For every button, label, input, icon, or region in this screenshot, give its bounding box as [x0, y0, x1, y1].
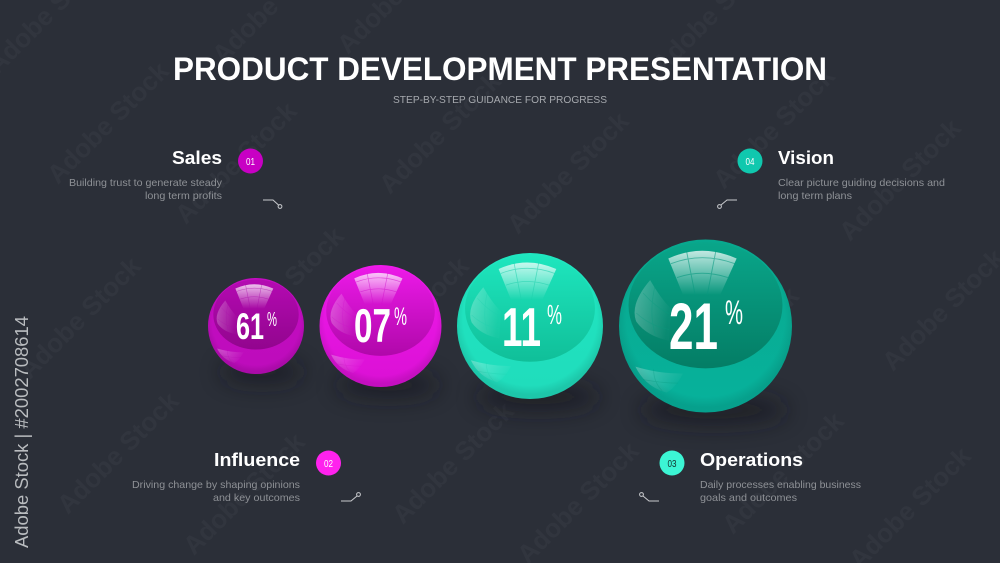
vertical stock id text: Adobe Stock | #2002708614: [12, 316, 32, 548]
text: Adobe Stock: [216, 220, 350, 354]
text block: influence description: Driving change by shaping opinions: [132, 479, 300, 491]
sphere: 21 percent: %: [725, 294, 743, 332]
panel: sales label: [69, 147, 282, 208]
text: Adobe Stock: [716, 405, 850, 539]
connector: vision: [718, 200, 737, 208]
subtitle: STEP-BY-STEP GUIDANCE FOR PROGRESS: [393, 94, 607, 106]
badge 01: 01: [246, 156, 255, 168]
sphere: 07 percent: %: [394, 303, 407, 331]
sphere: 07 percent: [320, 265, 442, 399]
text: Adobe Stock: [373, 65, 507, 199]
sphere: 21 percent: 21: [669, 289, 718, 363]
sphere: 61 percent: [208, 278, 304, 385]
text block: influence description: [132, 479, 300, 504]
text block: influence description: and key outcomes: [213, 492, 300, 504]
text: Adobe Stock: [41, 55, 175, 189]
text: Adobe Stock: [501, 105, 635, 239]
text: Adobe Stock: [51, 385, 185, 519]
badge 04: [738, 148, 762, 174]
panel: vision label: [718, 147, 945, 208]
text block: operations description: goals and outcomes: [700, 492, 797, 504]
badge 04: 04: [746, 156, 755, 168]
badge 03: [660, 450, 684, 476]
text block: vision description: long term plans: [778, 190, 852, 202]
text: Adobe Stock: [707, 60, 841, 194]
badge 01: [238, 148, 263, 174]
text: Adobe Stock: [386, 395, 520, 529]
connector: operations: [640, 493, 659, 501]
sphere: 61 percent: 61: [236, 306, 264, 347]
text: Adobe Stock: [833, 112, 967, 246]
sphere: 11 percent: 11: [502, 296, 541, 358]
panel: influence label: [132, 449, 360, 504]
text block: sales description: Building trust to generate steady: [69, 177, 223, 189]
text: Adobe Stock: [671, 280, 805, 414]
connector: influence: [341, 493, 360, 501]
text block: sales description: [69, 177, 223, 202]
text block: vision description: Clear picture guiding decisions and: [778, 177, 945, 189]
sphere: 61 percent: %: [267, 309, 277, 331]
text block: sales description: long term profits: [145, 190, 222, 202]
text block: vision description: [778, 177, 945, 202]
text block: operations description: [700, 479, 861, 504]
heading: sales: Sales: [172, 147, 222, 168]
heading: vision: Vision: [778, 147, 834, 168]
text: Adobe Stock: [177, 426, 311, 560]
sphere: 11 percent: %: [547, 299, 562, 330]
text: Adobe Stock: [341, 250, 475, 384]
badge 02: [316, 450, 341, 476]
panel: operations label: [640, 449, 861, 504]
sphere: 21 percent: [619, 240, 792, 426]
badge 03: 03: [668, 458, 677, 470]
text: Adobe Stock: [13, 250, 147, 384]
connector: sales: [263, 200, 282, 208]
heading: operations: Operations: [700, 449, 803, 470]
heading: influence: Influence: [214, 449, 300, 470]
badge 02: 02: [324, 458, 333, 470]
sphere: 07 percent: 07: [354, 299, 391, 352]
sphere: 11 percent: [457, 253, 603, 412]
text block: operations description: Daily processes enabling business: [700, 479, 861, 491]
title: PRODUCT DEVELOPMENT PRESENTATION: [173, 51, 827, 87]
text: Adobe Stock: [169, 95, 303, 229]
